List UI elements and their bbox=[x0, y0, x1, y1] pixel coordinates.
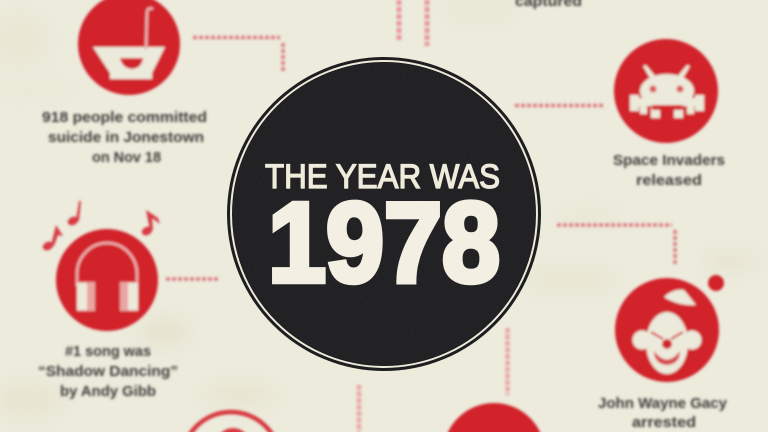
caption: Jonestown: 918 people committed bbox=[42, 109, 207, 126]
caption: Jonestown: on Nov 18 bbox=[92, 149, 161, 166]
icon: partial bottom target ring bbox=[182, 412, 280, 432]
connector: top right vertical bbox=[424, 0, 430, 46]
caption: Space Invaders: Space Invaders bbox=[613, 152, 725, 169]
connector: Jonestown bbox=[193, 38, 283, 72]
icon: music notes bbox=[41, 201, 160, 252]
icon: clown bbox=[615, 275, 724, 382]
connector: Gacy bbox=[557, 225, 675, 265]
caption: John Wayne Gacy: arrested bbox=[632, 414, 696, 431]
caption: John Wayne Gacy: John Wayne Gacy bbox=[598, 395, 728, 412]
icon: soup bowl and ladle bbox=[78, 0, 180, 95]
caption: Jonestown: suicide in Jonestown bbox=[48, 129, 204, 146]
central badge bbox=[227, 57, 541, 371]
caption: number one song: “Shadow Dancing” bbox=[38, 363, 178, 380]
heading: the year was: THE YEAR WAS bbox=[265, 158, 500, 196]
icon: partial bottom red circle bbox=[443, 403, 545, 432]
caption: Space Invaders: released bbox=[636, 172, 702, 189]
connector: headphones bbox=[166, 277, 220, 281]
connector: bottom right vertical bbox=[505, 328, 510, 395]
caption: number one song: by Andy Gibb bbox=[60, 383, 156, 400]
connector: top left vertical bbox=[396, 0, 402, 42]
caption: number one song: #1 song was bbox=[65, 343, 151, 360]
icon: headphones with notes bbox=[41, 201, 160, 331]
heading: 1978: 1978 bbox=[268, 180, 500, 306]
connector: bottom left vertical bbox=[357, 385, 361, 432]
icon: space invader bbox=[614, 39, 718, 143]
connector: Space Invaders bbox=[515, 104, 604, 107]
